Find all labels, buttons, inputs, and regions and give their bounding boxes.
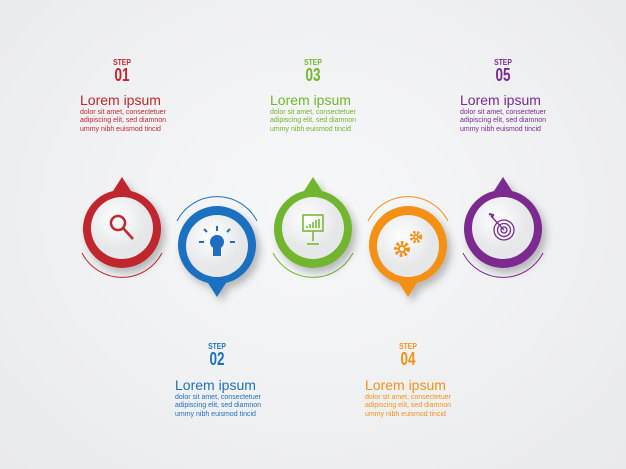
icon: target (489, 214, 514, 240)
step 04 text: ummy nibh euismod tincid (365, 411, 446, 418)
step 05 text: ummy nibh euismod tincid (460, 126, 541, 133)
step 01 label: 01 (114, 65, 130, 85)
step 05 label: STEP (494, 58, 512, 67)
step 02 text: dolor sit amet, consectetuer (175, 394, 261, 401)
step 02 label: STEP (208, 342, 226, 351)
step 05 text: dolor sit amet, consectetuer (460, 109, 546, 116)
icon: magnifier (111, 216, 133, 239)
node 5 purple (463, 177, 543, 277)
icon: bulb (199, 226, 235, 256)
step 04 label: STEP (399, 342, 417, 351)
step 04 text: adipiscing elit, sed diamnon (365, 402, 451, 409)
step 01 text: Lorem ipsum (80, 92, 161, 108)
step 01 text (80, 92, 166, 133)
step 02 text: ummy nibh euismod tincid (175, 411, 256, 418)
step 03 label (304, 58, 322, 85)
step 04 text: Lorem ipsum (365, 377, 446, 393)
icon: presentation board (303, 215, 323, 244)
step 03 text (270, 92, 356, 133)
step 03 label: STEP (304, 58, 322, 67)
step 04 text (365, 377, 451, 418)
node 2 blue (177, 197, 257, 297)
step 03 label: 03 (305, 65, 321, 85)
step 03 text: ummy nibh euismod tincid (270, 126, 351, 133)
icon: gears (396, 232, 420, 255)
step 03 text: dolor sit amet, consectetuer (270, 109, 356, 116)
step 05 label: 05 (495, 65, 511, 85)
step 01 text: ummy nibh euismod tincid (80, 126, 161, 133)
step 02 text (175, 377, 261, 418)
node 1 red (82, 177, 162, 277)
step 01 text: dolor sit amet, consectetuer (80, 109, 166, 116)
step 02 label (208, 342, 226, 369)
node 3 green (273, 177, 353, 277)
step 03 text: Lorem ipsum (270, 92, 351, 108)
step 05 text: adipiscing elit, sed diamnon (460, 117, 546, 124)
step 03 text: adipiscing elit, sed diamnon (270, 117, 356, 124)
step 04 text: dolor sit amet, consectetuer (365, 394, 451, 401)
step 02 text: adipiscing elit, sed diamnon (175, 402, 261, 409)
step 05 text: Lorem ipsum (460, 92, 541, 108)
step 04 label: 04 (400, 349, 416, 369)
node 4 orange (368, 197, 448, 297)
step 05 text (460, 92, 546, 133)
step 01 label (113, 58, 131, 85)
step 02 text: Lorem ipsum (175, 377, 256, 393)
step 01 label: STEP (113, 58, 131, 67)
step 05 label (494, 58, 512, 85)
step 04 label (399, 342, 417, 369)
step 02 label: 02 (209, 349, 225, 369)
step 01 text: adipiscing elit, sed diamnon (80, 117, 166, 124)
